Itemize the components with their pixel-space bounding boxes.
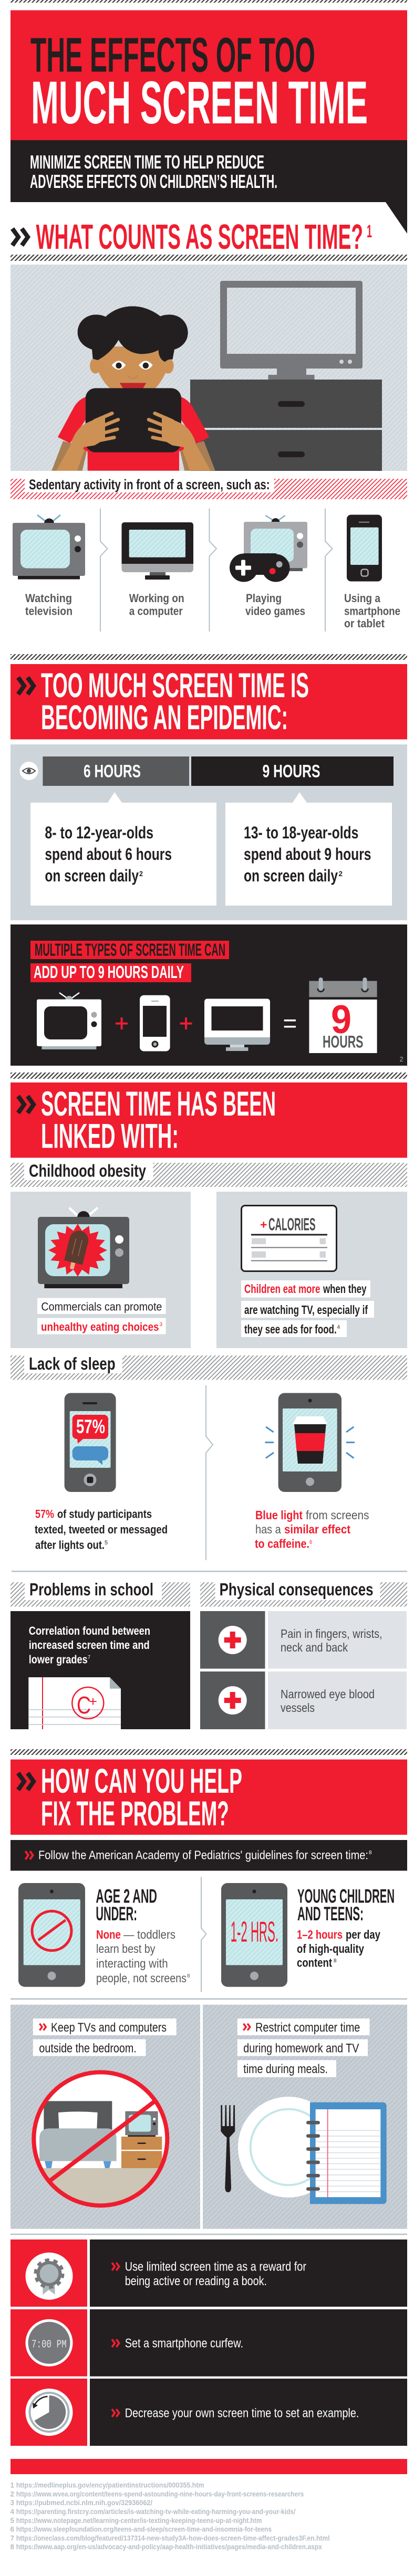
band: AAP guidelines: 8 xyxy=(369,1850,372,1856)
text: age heading: UNDER: xyxy=(96,1903,137,1925)
band: AAP guidelines: Follow the American Academy of Pediatrics' guidelines for screen time: xyxy=(38,1848,368,1862)
label: Watching xyxy=(25,592,72,605)
text: none toddlers: learn best by xyxy=(96,1942,156,1955)
text: none toddlers: people, not screens xyxy=(96,1971,187,1985)
band: lack of sleep: Lack of sleep xyxy=(29,1354,116,1373)
icon: chevron xyxy=(111,2339,120,2348)
card: 8 to 12 year olds: on screen daily xyxy=(45,866,139,885)
activity dividers xyxy=(100,508,332,632)
label: or tablet xyxy=(344,617,385,630)
band: problems in school xyxy=(11,1580,190,1606)
references: https://oneclass.com/blog/featured/137314-new-study3A-how-does-screen-time-affect-grades3F.en.html xyxy=(16,2534,330,2542)
heading: what counts as screen time: 1 xyxy=(367,222,372,241)
panel: problems in school xyxy=(11,1611,190,1729)
icon: timer xyxy=(25,2389,73,2436)
icon: graded paper: C xyxy=(77,1691,91,1719)
text: children eat more: when they xyxy=(323,1282,367,1296)
icon: calendar 9 hours xyxy=(309,977,377,1053)
text: none toddlers: interacting with xyxy=(96,1957,168,1970)
icon: calendar 9 hours: HOURS xyxy=(323,1033,364,1052)
heading: how can you help fix the problem xyxy=(11,1760,407,1835)
label: Playing xyxy=(246,592,282,605)
label: television xyxy=(25,605,73,617)
icon: plus xyxy=(180,1017,192,1029)
text: narrowed vessels xyxy=(281,1687,375,1715)
band: lack of sleep xyxy=(11,1354,407,1380)
card: 8 to 12 year olds: 8- to 12-year-olds xyxy=(45,823,153,842)
icon: TV with popsicle ad xyxy=(38,1208,129,1288)
guideline: young children and teens xyxy=(221,1883,395,1987)
activity: watching television xyxy=(13,515,85,617)
icon: chevron xyxy=(111,2409,120,2417)
text: keep TVs: outside the bedroom. xyxy=(39,2042,137,2056)
text: blue light: has a xyxy=(255,1522,281,1536)
card: 13 to 18 year olds: 2 xyxy=(338,869,343,878)
title block xyxy=(11,10,407,141)
card: 8 to 12 year olds: 2 xyxy=(139,869,143,878)
card: 13 to 18 year olds: spend about 9 hours xyxy=(244,845,371,864)
icon: digital clock xyxy=(25,2319,73,2367)
text: 57 percent of study participants: 57% xyxy=(35,1508,54,1520)
text: blue light: 6 xyxy=(309,1539,312,1545)
icon: eye xyxy=(20,762,38,780)
tab: 6 hours xyxy=(43,756,189,786)
icon: fork xyxy=(221,2105,235,2192)
card: 13 to 18 year olds xyxy=(225,792,392,906)
text: 1-2 hours: 1–2 hours xyxy=(297,1928,343,1941)
text: children eat more: Children eat more xyxy=(244,1282,320,1296)
panel: screen types add up to 9 hours xyxy=(11,924,407,1066)
text: restrict computer time: time during meals. xyxy=(243,2062,328,2076)
band: sedentary activity: Sedentary activity in front of a screen, such as: xyxy=(29,477,270,492)
references xyxy=(11,2482,330,2551)
heading: how can you help fix the problem: HOW CAN YOU HELP xyxy=(41,1761,242,1800)
icon: graded paper: + xyxy=(89,1694,97,1709)
references: https://www.notepage.net/learning-center/is-texting-keeping-teens-up-at-night.htm xyxy=(16,2517,262,2525)
card: 13 to 18 year olds: on screen daily xyxy=(244,866,338,885)
panel: pain xyxy=(200,1611,407,1669)
references: 5 xyxy=(11,2517,15,2525)
icon: plus xyxy=(116,1017,128,1029)
icon: tablet with 1-2 hrs xyxy=(221,1883,287,1987)
text: 1-2 hours: per day xyxy=(346,1928,380,1941)
text: reward xyxy=(125,2259,306,2288)
callout: multiple types xyxy=(30,940,229,959)
subtitle text xyxy=(30,151,277,192)
text: 1-2 hours: 8 xyxy=(334,1958,337,1964)
icon: double chevron xyxy=(16,1772,36,1791)
text: age heading: AGE 2 AND xyxy=(96,1886,157,1907)
text: correlation: Correlation found between xyxy=(29,1624,150,1637)
tab: 9 hours xyxy=(191,756,394,786)
text: blue light xyxy=(255,1508,369,1551)
text: 57 percent of study participants: texted, tweeted or messaged xyxy=(35,1523,168,1536)
text: commercials can promote xyxy=(37,1298,166,1334)
icon: calendar 9 hours: 9 xyxy=(331,997,351,1042)
icon: tablet with prohibition sign xyxy=(18,1883,85,1987)
text: restrict computer time: Restrict computer time xyxy=(255,2021,360,2035)
text: 1-2 hours: content xyxy=(297,1956,332,1970)
references: 4 xyxy=(11,2508,15,2516)
references: https://parenting.firstcry.com/articles/is-watching-tv-while-eating-harming-you-and-your-kids/ xyxy=(16,2508,296,2516)
text: 57 percent of study participants: after lights out. xyxy=(35,1538,105,1552)
text: none toddlers: 8 xyxy=(187,1973,190,1979)
band: sedentary activity xyxy=(11,477,407,499)
icon: smartphone xyxy=(347,514,382,582)
text: none toddlers: None xyxy=(96,1928,121,1941)
text: narrowed vessels: vessels xyxy=(281,1701,315,1715)
tab: 9 hours: 9 HOURS xyxy=(263,761,320,781)
heading: how can you help fix the problem: FIX THE PROBLEM? xyxy=(41,1794,229,1833)
panel: keep TVs out of the bedroom xyxy=(11,2005,200,2229)
text: 57 percent of study participants: of study participants xyxy=(57,1508,152,1520)
text: 57 percent of study participants: 5 xyxy=(105,1540,108,1546)
text: keep TVs xyxy=(33,2018,177,2056)
icon: red chevron xyxy=(25,1850,34,1860)
panel: narrowed vessels xyxy=(200,1671,407,1729)
text: commercials can promote: 3 xyxy=(160,1322,163,1328)
card: 8 to 12 year olds: spend about 6 hours xyxy=(45,845,172,864)
callout: add up: ADD UP TO 9 HOURS DAILY xyxy=(34,962,184,982)
text: pain: neck and back xyxy=(281,1641,348,1654)
illustration: crossed-out bedroom xyxy=(32,2072,170,2209)
text: pain: Pain in fingers, wrists, xyxy=(281,1627,382,1641)
label xyxy=(245,592,305,617)
icon: award badge xyxy=(25,2253,73,2300)
text: commercials can promote: Commercials can promote xyxy=(41,1300,162,1313)
icon: double chevron xyxy=(16,676,36,696)
text: blue light: from screens xyxy=(306,1508,369,1522)
icon: television xyxy=(13,515,85,580)
band: physical consequences: Physical consequences xyxy=(220,1580,374,1599)
text: teens heading: AND TEENS: xyxy=(297,1903,364,1925)
references: https://www.sleepfoundation.org/teens-and-sleep/screen-time-and-insomnia-for-teens xyxy=(16,2525,272,2533)
references: https://www.wvea.org/content/teens-spend-astounding-nine-hours-day-front-screens-researchers xyxy=(16,2490,304,2498)
panel: child with tablet and TV illustration xyxy=(11,265,407,471)
text: commercials can promote: unhealthy eating choices xyxy=(41,1320,159,1333)
text: children eat more: are watching TV, especially if xyxy=(244,1303,368,1317)
subtitle band xyxy=(11,140,407,234)
band: physical consequences xyxy=(200,1580,407,1606)
icon: medical cross xyxy=(219,1626,247,1654)
text: restrict computer time: during homework and TV xyxy=(243,2042,359,2056)
icon: television on stand xyxy=(190,281,382,471)
label: Using a xyxy=(344,592,380,605)
text: none toddlers: — toddlers xyxy=(123,1928,175,1941)
text: children eat more xyxy=(241,1280,374,1337)
text: none toddlers xyxy=(96,1928,190,1985)
icon: TV and game controller xyxy=(230,516,307,582)
icon: graded paper xyxy=(28,1677,121,1729)
icon: nutrition card xyxy=(242,1205,336,1271)
text: curfew: Set a smartphone curfew. xyxy=(125,2337,243,2351)
icon: computer monitor xyxy=(122,522,193,580)
callout: add up xyxy=(30,962,191,982)
icon: white phone xyxy=(140,995,170,1051)
references: https://pubmed.ncbi.nlm.nih.gov/32936062/ xyxy=(16,2499,152,2507)
text: keep TVs: Keep TVs and computers xyxy=(51,2021,167,2035)
icon: white monitor xyxy=(204,998,270,1051)
tip row: set an example xyxy=(11,2379,407,2446)
icon: digital clock: 7:00 PM xyxy=(32,2339,67,2351)
text: reward: Use limited screen time as a reward for xyxy=(125,2259,306,2274)
references: 7 xyxy=(11,2534,14,2542)
references: 1 xyxy=(11,2482,15,2489)
guideline: young children and teens: 1-2 HRS. xyxy=(231,1915,278,1948)
card: 13 to 18 year olds: 13- to 18-year-olds xyxy=(244,823,358,842)
band: childhood obesity: Childhood obesity xyxy=(29,1161,146,1180)
tab: 6 hours: 6 HOURS xyxy=(84,761,141,781)
panel: commercials xyxy=(11,1192,191,1348)
icon: phone with 57 percent bubble xyxy=(65,1393,116,1492)
text: pain xyxy=(281,1627,382,1654)
label: Working on xyxy=(129,592,184,605)
text: restrict computer time xyxy=(237,2018,370,2077)
illustration: girl holding tablet xyxy=(51,306,215,471)
panel: restrict computer time during homework and meals xyxy=(203,2005,407,2229)
icon: nutrition card: CALORIES xyxy=(268,1215,315,1234)
icon: phone with 57 percent bubble: 57% xyxy=(76,1416,105,1437)
activity: playing video games xyxy=(230,516,307,617)
text: blue light: Blue light xyxy=(255,1508,303,1522)
guideline: age 2 and under xyxy=(18,1883,190,1987)
activity: using a smartphone or tablet xyxy=(344,514,400,630)
footer bar xyxy=(11,2459,407,2474)
footnote marker: 2 xyxy=(399,1055,403,1063)
subtitle text: MINIMIZE SCREEN TIME TO HELP REDUCE xyxy=(30,151,264,173)
panel: daily hours by age xyxy=(11,744,407,920)
heading: too much screen time is becoming an epidemic xyxy=(11,664,407,739)
activity: working on a computer xyxy=(122,522,193,617)
label xyxy=(129,592,184,617)
illustration: plate and notebook xyxy=(238,2097,387,2204)
label: smartphone xyxy=(344,605,400,617)
text: set an example: Decrease your own screen time to set an example. xyxy=(125,2406,359,2420)
top hatch rule xyxy=(11,0,407,3)
icon: equals xyxy=(284,1019,296,1028)
band: childhood obesity xyxy=(11,1161,407,1187)
icon: tablet with coffee cup xyxy=(265,1393,355,1492)
text: reward: being active or reading a book. xyxy=(125,2274,267,2288)
text: correlation xyxy=(29,1624,150,1666)
tip row: reward xyxy=(11,2239,407,2307)
text: blue light: similar effect xyxy=(284,1522,350,1536)
text: 57 percent of study participants xyxy=(35,1508,168,1552)
label xyxy=(344,592,400,630)
text: 1-2 hours: of high-quality xyxy=(297,1942,364,1955)
callout: multiple types: MULTIPLE TYPES OF SCREEN TIME CAN xyxy=(35,940,225,959)
card: 8 to 12 year olds xyxy=(30,792,216,906)
text: teens heading xyxy=(297,1886,395,1925)
label: video games xyxy=(245,605,305,617)
text: correlation: 7 xyxy=(88,1655,90,1660)
heading: screen time has been linked with xyxy=(11,1082,407,1158)
references: https://www.aap.org/en-us/advocacy-and-policy/aap-health-initiatives/pages/media-and-children.aspx xyxy=(16,2543,322,2551)
text: age heading xyxy=(96,1886,157,1925)
icon: chevron xyxy=(111,2262,120,2271)
band: AAP guidelines xyxy=(11,1840,407,1871)
label: a computer xyxy=(129,605,183,617)
text: children eat more: 4 xyxy=(337,1324,340,1330)
icon: medical cross xyxy=(219,1686,247,1715)
text: narrowed vessels: Narrowed eye blood xyxy=(281,1687,375,1701)
text: children eat more: they see ads for food. xyxy=(244,1322,337,1336)
references: 8 xyxy=(11,2543,15,2551)
references: 6 xyxy=(11,2525,15,2533)
text: correlation: lower grades xyxy=(29,1653,88,1666)
text: blue light: to caffeine. xyxy=(255,1537,309,1551)
references: 2 xyxy=(11,2490,14,2498)
band: problems in school: Problems in school xyxy=(29,1580,153,1599)
icon: double chevron xyxy=(16,1095,36,1114)
text: 1-2 hours xyxy=(297,1928,380,1970)
text: correlation: increased screen time and xyxy=(29,1638,150,1652)
tip row: curfew xyxy=(11,2309,407,2377)
label xyxy=(25,592,73,617)
icon: double chevron xyxy=(11,227,30,247)
references: https://medlineplus.gov/ency/patientinstructions/000355.htm xyxy=(16,2482,204,2489)
heading: screen time has been linked with: LINKED WITH: xyxy=(41,1116,179,1155)
references: 3 xyxy=(11,2499,15,2507)
icon: white TV xyxy=(37,993,101,1049)
panel: calories xyxy=(216,1192,407,1348)
